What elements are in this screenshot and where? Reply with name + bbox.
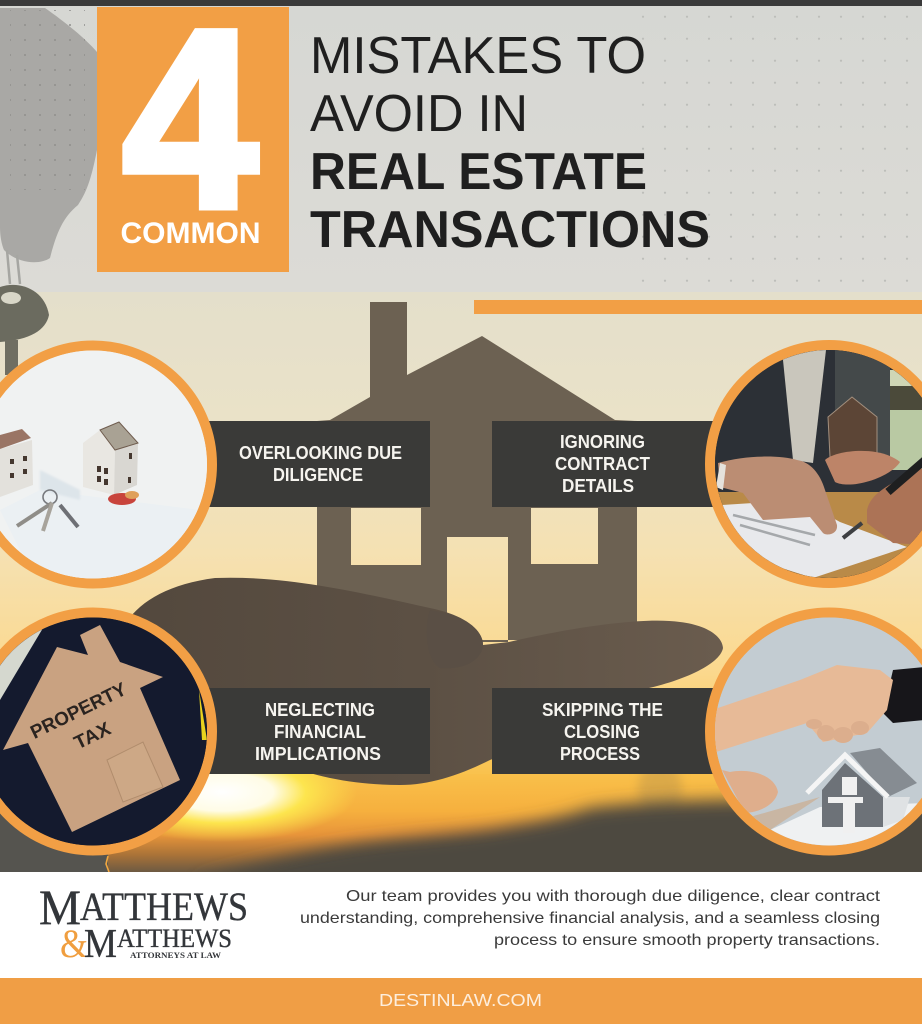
key on keyring: [0, 250, 49, 375]
label: ignoring contract details: DETAILS: [562, 476, 634, 496]
word common: COMMON: [120, 217, 260, 250]
panel: orange 4 common box: [97, 0, 289, 272]
panel: hand holding paper house photo: [0, 292, 922, 900]
label: overlooking due diligence: [205, 421, 430, 507]
hand photo fragment: [0, 8, 97, 262]
logo: Matthews and Matthews attorneys at law: &: [60, 921, 88, 966]
logo: Matthews and Matthews attorneys at law: [39, 879, 248, 966]
label: neglecting financial implications: FINANCIAL: [274, 722, 366, 742]
title: [310, 27, 710, 259]
footer description text: understanding, comprehensive financial analysis, and a seamless closing: [300, 910, 880, 927]
top bar: [0, 0, 922, 6]
label: skipping the closing process: CLOSING: [564, 722, 640, 742]
label: overlooking due diligence: OVERLOOKING DUE: [239, 443, 402, 463]
circle photo: model houses and keys: [0, 346, 220, 590]
text: property tax on the paper house: TAX: [71, 718, 115, 754]
label: skipping the closing process: SKIPPING THE: [542, 700, 663, 720]
label: skipping the closing process: PROCESS: [560, 744, 640, 764]
label: neglecting financial implications: [205, 688, 430, 774]
label: skipping the closing process: [492, 688, 717, 774]
logo: Matthews and Matthews attorneys at law: ATTORNEYS AT LAW: [130, 951, 221, 960]
label: ignoring contract details: IGNORING: [560, 432, 645, 452]
open hand: [120, 578, 723, 785]
circle photo: property tax paper house: [0, 610, 220, 850]
accent orange bar: [474, 300, 922, 314]
title: AVOID IN: [310, 85, 528, 143]
logo: Matthews and Matthews attorneys at law: ATTHEWS: [80, 884, 248, 929]
label: ignoring contract details: [492, 421, 717, 507]
label: ignoring contract details: CONTRACT: [555, 454, 650, 474]
logo: Matthews and Matthews attorneys at law: M: [84, 920, 117, 966]
title: MISTAKES TO: [310, 27, 646, 85]
title: TRANSACTIONS: [310, 201, 710, 259]
paper house silhouette: [317, 302, 637, 642]
label: neglecting financial implications: IMPLICATIONS: [255, 744, 381, 764]
bottom orange band: [0, 978, 922, 1024]
footer description text: [300, 888, 881, 949]
logo: Matthews and Matthews attorneys at law: ATTHEWS: [117, 924, 232, 953]
logo: Matthews and Matthews attorneys at law: M: [39, 879, 81, 935]
label: overlooking due diligence: DILIGENCE: [273, 465, 363, 485]
header background: [0, 6, 922, 293]
website url: DESTINLAW.COM: [379, 990, 542, 1010]
footer description text: process to ensure smooth property transactions.: [494, 932, 880, 949]
circle photo: contract signing: [710, 345, 922, 592]
title: REAL ESTATE: [310, 143, 647, 201]
text: property tax on the paper house: PROPERTY: [27, 679, 130, 744]
footer panel: [0, 872, 922, 978]
circle photo: handshake over model house: [710, 610, 922, 860]
footer description text: Our team provides you with thorough due diligence, clear contract: [346, 888, 881, 905]
label: neglecting financial implications: NEGLECTING: [265, 700, 375, 720]
